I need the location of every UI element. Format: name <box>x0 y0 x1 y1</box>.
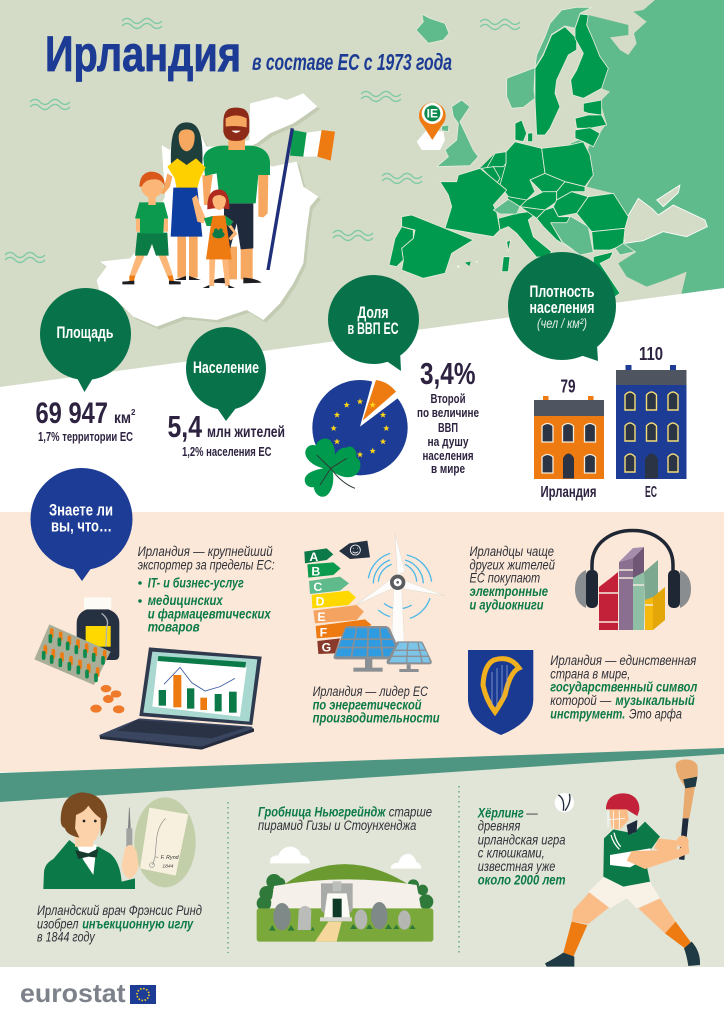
EU member states <box>389 14 628 300</box>
energy labels: C <box>313 580 322 594</box>
label: EU: ЕС <box>645 484 657 501</box>
bubble: density <box>508 252 616 361</box>
bubble label line 1: Доля <box>358 303 388 322</box>
logo: eurostat: eurostat <box>20 978 126 1008</box>
text: hurling: Хёрлинг <box>477 805 524 820</box>
panel: population <box>168 327 285 459</box>
text: harp: государственный символ <box>550 680 698 695</box>
bubble: did you know: вы, что… <box>51 516 112 536</box>
man <box>203 108 270 283</box>
icon: blister pack <box>34 624 111 685</box>
note: GDP per capita: на душу <box>428 435 469 449</box>
note: GDP per capita: по величине <box>417 406 479 420</box>
unit: млн жителей <box>207 424 285 441</box>
girl <box>192 189 237 288</box>
illustration: doctor with syringe <box>43 792 196 889</box>
icon: coat of arms with harp <box>468 650 533 735</box>
text: harp: Это арфа <box>629 706 682 721</box>
icon: laptop <box>99 647 262 750</box>
icon: smiley tag <box>339 541 370 559</box>
icon: shamrock on dress <box>212 228 225 238</box>
icon: solar panels <box>334 626 432 672</box>
slice: Ireland share <box>363 380 396 421</box>
energy labels <box>304 548 372 655</box>
energy labels: F <box>320 625 328 639</box>
Norway <box>507 7 592 108</box>
house: EU <box>616 365 686 479</box>
text: exports: медицинских <box>148 593 223 608</box>
Bosnia Serbia <box>550 216 593 255</box>
text: harp <box>550 653 698 721</box>
text: hurling <box>477 805 566 887</box>
text: audiobooks: и аудиокниги <box>470 597 544 612</box>
Iceland <box>416 14 449 43</box>
bubble: did you know: Знаете ли <box>49 500 113 520</box>
player jersey <box>603 822 660 887</box>
text: doctor: инъекционную иглу <box>82 916 194 931</box>
player arms <box>627 836 689 869</box>
lower white background <box>0 288 724 513</box>
text: energy: Ирландия — лидер ЕС <box>313 684 428 699</box>
map of Europe <box>389 0 724 300</box>
text: harp: инструмент. <box>550 706 625 721</box>
text: hurling: древняя <box>478 819 520 834</box>
player legs <box>545 892 700 967</box>
note: date: 1844 <box>162 864 174 870</box>
bubble: area <box>40 288 131 392</box>
Switzerland <box>493 199 520 214</box>
bubble label line 1: Плотность <box>530 282 594 301</box>
energy labels: G <box>322 641 331 655</box>
text: hurling: около 2000 лет <box>478 872 566 887</box>
text: harp: музыкальный <box>615 693 695 708</box>
panel: top background <box>0 0 724 400</box>
icon: shamrock <box>306 440 359 496</box>
text: harp: страна в мире, <box>550 666 630 681</box>
Ireland highlighted <box>417 130 445 150</box>
panel: area <box>36 288 136 444</box>
text: audiobooks: Ирландцы чаще <box>470 544 554 559</box>
note: GDP per capita: Второй <box>430 392 466 406</box>
Ireland island shape <box>97 93 321 329</box>
woman <box>161 122 208 280</box>
bubble: population <box>186 327 266 421</box>
icon: pill bottle <box>77 597 119 660</box>
text: hurling: известная уже <box>478 859 555 874</box>
panel: GDP share <box>306 275 479 496</box>
trees <box>257 874 433 911</box>
note: 1,2% населения ЕС <box>182 445 272 459</box>
text: hurling: ирландская игра <box>478 832 566 847</box>
icon: clouds <box>270 847 421 869</box>
value: area: 69 947 <box>36 397 108 430</box>
note: Rynd signature: F. Rynd <box>161 855 180 861</box>
text: exports: и фармацевтических <box>148 606 271 621</box>
bubble: GDP share <box>328 275 419 371</box>
text: Newgrange: старше <box>389 805 432 820</box>
value: EU density: 110 <box>639 344 663 364</box>
value: GDP share: 3,4% <box>420 356 476 391</box>
tomb entrance <box>320 881 353 921</box>
energy labels: D <box>316 595 325 609</box>
icon: orange pills <box>90 685 124 713</box>
illustration: energy efficiency <box>304 533 445 672</box>
text: exports <box>138 544 275 635</box>
text: audiobooks: электронные <box>470 584 548 599</box>
ball <box>555 793 574 812</box>
bubble label line 2: населения <box>530 298 594 317</box>
text: harp: которой — <box>550 693 612 708</box>
text: exports: Ирландия — крупнейший <box>138 544 273 559</box>
note: GDP per capita: ВВП <box>438 421 458 435</box>
pie chart: EU GDP <box>306 375 408 496</box>
bubble label: Население <box>193 358 259 377</box>
note: GDP per capita <box>417 392 479 476</box>
text: energy: по энергетической <box>313 697 422 712</box>
player shorts <box>588 877 660 908</box>
bubble unit: (чел / км²) <box>537 315 587 331</box>
note: 1,7% территории ЕС <box>38 430 133 444</box>
house: Ireland <box>534 396 604 479</box>
illustration: hurling player <box>545 759 700 967</box>
value: Ireland density: 79 <box>560 376 576 396</box>
map pin: IE <box>419 102 446 140</box>
text: energy <box>313 684 440 726</box>
title: Ирландия <box>45 26 241 82</box>
bubble label line 2: в ВВП ЕС <box>348 319 398 338</box>
text: audiobooks: ЕС покупают <box>470 571 540 586</box>
panel: bottom section <box>0 748 724 967</box>
text: harp: Ирландия — единственная <box>550 653 696 668</box>
energy labels: E <box>317 610 326 624</box>
text: Newgrange <box>258 805 432 833</box>
note: GDP per capita: в мире <box>431 462 465 476</box>
text: audiobooks: других жителей <box>470 557 555 572</box>
text: doctor <box>37 903 202 945</box>
energy labels: A <box>309 550 318 564</box>
note: GDP per capita: населения <box>422 449 474 463</box>
panel: did you know <box>0 512 724 772</box>
energy labels: B <box>311 565 320 579</box>
panel: population density <box>508 252 686 501</box>
standing stones <box>273 902 411 930</box>
text: exports: IT- и бизнес-услуг <box>148 575 244 590</box>
unit exponent: 2 <box>131 408 136 417</box>
hurley stick <box>676 759 698 860</box>
diagonal teal band <box>0 748 724 802</box>
text: hurling: с клюшками, <box>478 846 545 861</box>
player head <box>606 793 639 835</box>
subtitle: в составе ЕС с 1973 года <box>252 49 452 75</box>
value: population: 5,4 <box>168 409 203 444</box>
icon: wind turbine <box>356 533 445 643</box>
text: doctor: в 1844 году <box>37 930 96 945</box>
text: exports: товаров <box>148 620 200 635</box>
flag of Ireland <box>266 128 335 270</box>
text: Newgrange: пирамид Гизы и Стоунхенджа <box>258 818 417 833</box>
map pin: IE: IE <box>427 107 438 121</box>
illustration: medicine and laptop <box>34 597 262 750</box>
text: audiobooks <box>470 544 555 612</box>
text: doctor: Ирландский врач Фрэнсис Ринд <box>37 903 202 918</box>
text: hurling: — <box>525 805 538 820</box>
UK <box>437 100 478 167</box>
text: exports: экспортер за пределы ЕС: <box>138 557 275 572</box>
text: Newgrange: Гробница Ньюгрейндж <box>258 805 386 820</box>
label: Ireland: Ирландия <box>540 484 596 501</box>
text: energy: производительности <box>313 711 440 726</box>
boy <box>122 172 181 284</box>
illustration: headphones and books <box>575 530 691 630</box>
illustration: family with flag <box>122 108 335 288</box>
text: doctor: изобрел <box>37 916 79 931</box>
unit: км <box>114 410 131 427</box>
illustration: Newgrange tomb <box>257 847 433 942</box>
bubble label: Площадь <box>56 323 114 342</box>
bubble: did you know <box>31 468 133 581</box>
